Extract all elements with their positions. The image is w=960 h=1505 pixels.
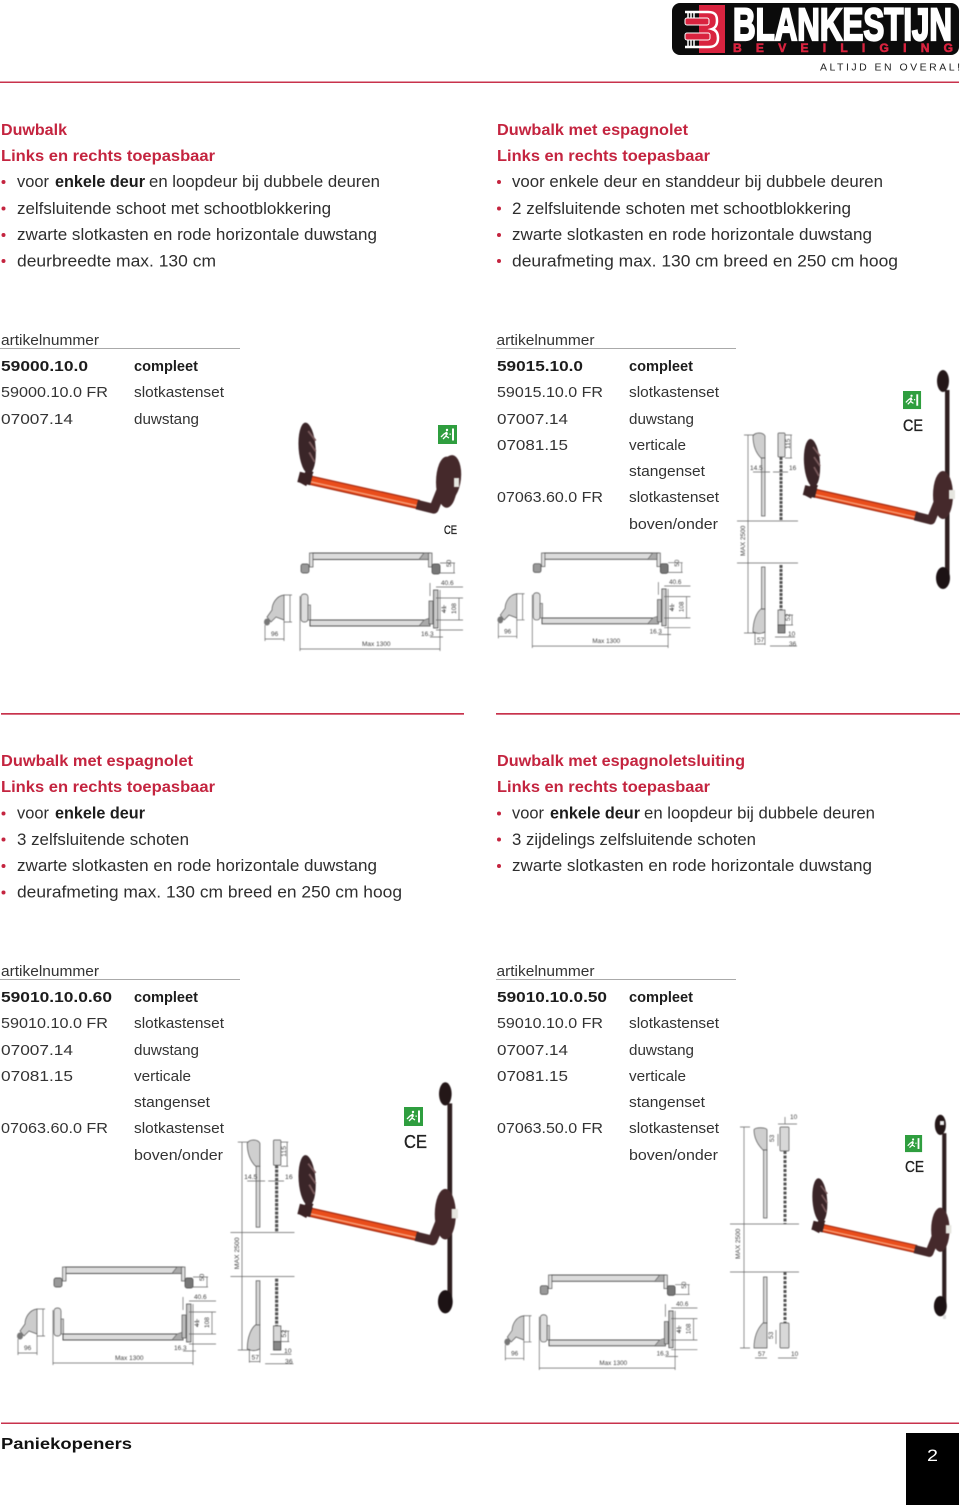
feature list: zwarte slotkasten en rode horizontale duwstang [512, 226, 872, 244]
article number table: artikelnummer [496, 333, 595, 349]
technical drawing: vertical: 36 [789, 641, 797, 648]
article number table: verticale [134, 1069, 191, 1085]
CE mark: CE [444, 525, 457, 537]
article number table: artikelnummer [1, 333, 99, 349]
technical drawing [264, 553, 463, 651]
technical drawing: horizontal: 41 [676, 1326, 683, 1333]
feature list: voor [512, 804, 544, 822]
technical drawing: vertical: 10 [284, 1348, 292, 1355]
icon: emergency exit sign [438, 425, 457, 444]
technical drawing: horizontal: 40.6 [194, 1294, 207, 1301]
header: company logo [672, 0, 959, 55]
technical drawing: vertical: MAX 2500 [234, 1237, 241, 1269]
feature list [2, 173, 380, 270]
feature list: en loopdeur bij dubbele deuren [149, 173, 380, 191]
feature list: en loopdeur bij dubbele deuren [644, 804, 875, 822]
feature list: voor [17, 804, 49, 822]
article number table: 59010.10.0.50 [497, 990, 607, 1006]
technical drawing: horizontal: 50 [681, 1281, 688, 1289]
product photo: push bar [297, 422, 463, 509]
technical drawing: horizontal [497, 553, 690, 648]
article number table: stangenset [134, 1095, 210, 1111]
technical drawing: horizontal: 50 [199, 1273, 206, 1281]
technical drawing: horizontal: 16.3 [174, 1345, 187, 1352]
technical drawing: horizontal: 108 [204, 1317, 211, 1328]
heading: Links en rechts toepasbaar [1, 148, 215, 165]
page number box: 2 [927, 1446, 938, 1465]
icon: emergency exit sign [404, 1107, 423, 1126]
article number table: verticale [629, 1069, 686, 1085]
heading: Duwbalk met espagnolet [497, 122, 689, 139]
technical drawing: vertical: 52 [281, 1330, 288, 1337]
icon: emergency exit sign [905, 1135, 922, 1152]
technical drawing: 96 [271, 631, 279, 638]
feature list: enkele deur [55, 173, 146, 191]
technical drawing: vertical: 10 [791, 1351, 799, 1358]
CE mark: CE [903, 417, 923, 435]
heading [497, 122, 710, 165]
article number table: slotkastenset [134, 1121, 224, 1137]
article number table [496, 333, 736, 533]
article number table: duwstang [629, 412, 694, 428]
technical drawing: horizontal: 50 [674, 559, 681, 567]
technical drawing: vertical: 52 [785, 613, 792, 621]
heading: Links en rechts toepasbaar [1, 779, 215, 796]
article number table: 07007.14 [497, 1043, 568, 1059]
article number table: compleet [629, 990, 693, 1006]
section divider right [496, 713, 960, 715]
article number table: 59015.10.0 [497, 359, 583, 375]
feature list [2, 804, 402, 902]
technical drawing: horizontal: 16.3 [650, 629, 662, 636]
article number table: boven/onder [134, 1148, 223, 1164]
article number table: 07007.14 [1, 1043, 73, 1059]
feature list: deurafmeting max. 130 cm breed en 250 cm hoog [512, 252, 898, 270]
technical drawing: vertical [730, 1114, 799, 1358]
technical drawing: 41 [441, 605, 448, 613]
article number table: slotkastenset [134, 1016, 224, 1032]
technical drawing: horizontal: 108 [686, 1323, 693, 1334]
slogan: ALTIJD EN OVERAL! [820, 62, 960, 74]
technical drawing: vertical: MAX 2500 [735, 1228, 742, 1259]
article number table: 07007.14 [497, 412, 568, 428]
technical drawing: horizontal: 16.3 [657, 1351, 669, 1358]
feature list: zwarte slotkasten en rode horizontale duwstang [512, 857, 872, 875]
technical drawing: horizontal [17, 1267, 216, 1365]
technical drawing: 16.3 [421, 631, 434, 638]
CE mark: CE [404, 1132, 427, 1152]
page number box [906, 1433, 959, 1505]
technical drawing: horizontal: Max 1300 [592, 638, 621, 645]
article number table: compleet [134, 990, 198, 1006]
icon: emergency exit sign [903, 391, 921, 409]
feature list: deurbreedte max. 130 cm [17, 252, 216, 270]
article number table: 59015.10.0 FR [497, 385, 603, 401]
article number table: artikelnummer [496, 964, 595, 980]
article number table: 07063.50.0 FR [497, 1121, 603, 1137]
article number table: duwstang [134, 412, 199, 428]
article number table: compleet [134, 359, 198, 375]
article number table: artikelnummer [1, 964, 99, 980]
article number table: 07063.60.0 FR [497, 490, 603, 506]
technical drawing: vertical [230, 1140, 294, 1366]
article number table: 59010.10.0 FR [497, 1016, 603, 1032]
article number table: duwstang [629, 1043, 694, 1059]
logo subtitle: BEVEILIGING [733, 41, 953, 55]
technical drawing: vertical: MAX 2500 [740, 525, 747, 556]
article number table: slotkastenset [629, 385, 719, 401]
feature list: enkele deur [550, 804, 641, 822]
technical drawing: vertical [737, 433, 798, 648]
technical drawing: vertical: 57 [758, 1351, 766, 1358]
product photo: push bar with espagnolet rods [297, 1082, 458, 1313]
footer title: Paniekopeners [1, 1436, 132, 1453]
article number table: compleet [629, 359, 693, 375]
technical drawing: vertical: 57 [757, 637, 765, 644]
feature list: enkele deur [55, 804, 146, 822]
panel: Duwbalk [0, 122, 463, 651]
article number table [496, 964, 736, 1164]
article number table: slotkastenset [629, 490, 719, 506]
heading: Links en rechts toepasbaar [497, 148, 710, 165]
technical drawing: vertical: 115 [281, 1146, 288, 1157]
technical drawing: 40.6 [441, 580, 454, 587]
article number table: slotkastenset [629, 1121, 719, 1137]
feature list: zwarte slotkasten en rode horizontale duwstang [17, 857, 377, 875]
technical drawing: horizontal: 41 [194, 1319, 201, 1327]
heading [1, 753, 215, 796]
article number table: 07081.15 [1, 1069, 73, 1085]
feature list: 3 zijdelings zelfsluitende schoten [512, 831, 756, 849]
feature list: zelfsluitende schoot met schootblokkering [17, 200, 331, 218]
article number table [0, 333, 240, 428]
heading: Duwbalk met espagnoletsluiting [497, 753, 745, 770]
article number table: stangenset [629, 1095, 705, 1111]
technical drawing: vertical: 10 [790, 1114, 798, 1121]
article number table: boven/onder [629, 517, 718, 533]
technical drawing: horizontal: 96 [504, 629, 512, 636]
technical drawing: horizontal: 41 [669, 604, 676, 611]
technical drawing: 50 [446, 559, 453, 567]
technical drawing: vertical: 36 [285, 1359, 293, 1366]
technical drawing: horizontal: 96 [24, 1345, 32, 1352]
article number table: 07081.15 [497, 1069, 568, 1085]
heading [1, 122, 215, 165]
article number table: slotkastenset [629, 1016, 719, 1032]
feature list: 3 zelfsluitende schoten [17, 831, 189, 849]
article number table: 07007.14 [1, 412, 73, 428]
logo badge [672, 3, 959, 55]
technical drawing: horizontal: 108 [679, 601, 686, 612]
article number table: 07063.60.0 FR [1, 1121, 108, 1137]
heading: Links en rechts toepasbaar [497, 779, 710, 796]
technical drawing: horizontal: Max 1300 [115, 1355, 144, 1362]
technical drawing: horizontal: 40.6 [676, 1301, 689, 1308]
technical drawing: horizontal: 96 [511, 1351, 519, 1358]
CE mark: CE [905, 1159, 924, 1176]
article number table: stangenset [629, 464, 705, 480]
feature list [497, 173, 898, 270]
article number table: boven/onder [629, 1148, 718, 1164]
technical drawing: vertical: 14.5 [750, 465, 763, 472]
feature list: voor enkele deur en standdeur bij dubbele deuren [512, 173, 883, 191]
article number table: 59010.10.0.60 [1, 990, 112, 1006]
technical drawing: vertical: 10 [788, 631, 796, 638]
technical drawing: vertical: 57 [251, 1354, 259, 1361]
article number table: slotkastenset [134, 385, 224, 401]
logo emblem [685, 5, 725, 53]
heading: Duwbalk met espagnolet [1, 753, 194, 770]
technical drawing: horizontal: Max 1300 [599, 1360, 628, 1367]
technical drawing: vertical: 53 [768, 1331, 775, 1339]
panel: Duwbalk met espagnolet (3 schoten) [0, 753, 458, 1366]
heading [497, 753, 745, 796]
feature list [497, 804, 875, 875]
technical drawing: vertical: 53 [769, 1134, 776, 1142]
article number table [0, 964, 240, 1164]
panel: Duwbalk met espagnoletsluiting [496, 753, 951, 1370]
feature list: voor [17, 173, 49, 191]
technical drawing: horizontal [504, 1275, 697, 1370]
section divider left [1, 713, 464, 715]
product photo: push bar with espagnolet closure [811, 1115, 951, 1319]
technical drawing: vertical: 115 [785, 438, 792, 449]
technical drawing: horizontal: 40.6 [669, 579, 682, 586]
article number table: 07081.15 [497, 438, 568, 454]
technical drawing: 108 [451, 603, 458, 614]
panel: Duwbalk met espagnolet (2 schoten) [496, 122, 955, 648]
article number table: 59000.10.0 FR [1, 385, 108, 401]
product photo: push bar with espagnolet rods [802, 370, 955, 589]
heading: Duwbalk [1, 122, 67, 139]
technical drawing: vertical: 16 [285, 1174, 293, 1181]
article number table: 59010.10.0 FR [1, 1016, 108, 1032]
article number table: verticale [629, 438, 686, 454]
feature list: deurafmeting max. 130 cm breed en 250 cm hoog [17, 884, 402, 902]
footer rule [1, 1422, 959, 1424]
article number table: 59000.10.0 [1, 359, 88, 375]
feature list: zwarte slotkasten en rode horizontale duwstang [17, 226, 377, 244]
technical drawing: Max 1300 [362, 641, 391, 648]
technical drawing: vertical: 14.5 [244, 1174, 258, 1181]
feature list: 2 zelfsluitende schoten met schootblokkering [512, 200, 851, 218]
technical drawing: vertical: 16 [789, 465, 797, 472]
article number table: duwstang [134, 1043, 199, 1059]
